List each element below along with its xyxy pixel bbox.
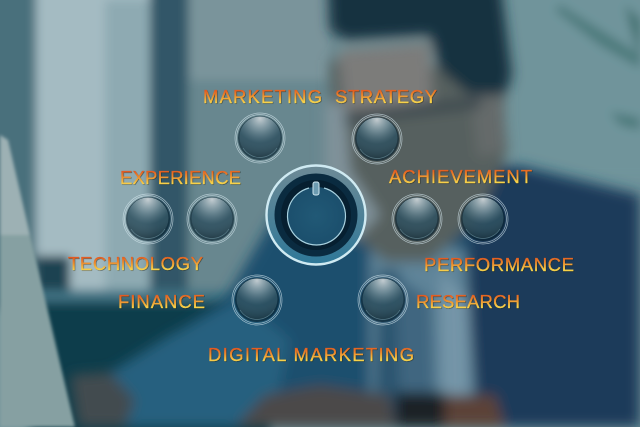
button: finance xyxy=(232,275,282,325)
button: experience inner xyxy=(187,194,237,244)
label: research: RESEARCH xyxy=(416,291,520,312)
button: marketing xyxy=(235,113,285,163)
button: achievement outer xyxy=(458,194,508,244)
label: marketing: MARKETING xyxy=(203,86,322,107)
label: achievement: ACHIEVEMENT xyxy=(389,166,532,187)
button: experience outer xyxy=(123,194,173,244)
label: digital marketing: DIGITAL MARKETING xyxy=(208,344,414,365)
label: performance: PERFORMANCE xyxy=(424,254,574,275)
button: strategy xyxy=(352,114,402,164)
button: research xyxy=(358,275,408,325)
main power dial xyxy=(266,166,366,264)
label: strategy: STRATEGY xyxy=(335,86,437,107)
button: achievement inner xyxy=(392,194,442,244)
label: technology: TECHNOLOGY xyxy=(68,253,203,274)
label: finance: FINANCE xyxy=(118,291,205,312)
label: experience: EXPERIENCE xyxy=(120,167,241,188)
